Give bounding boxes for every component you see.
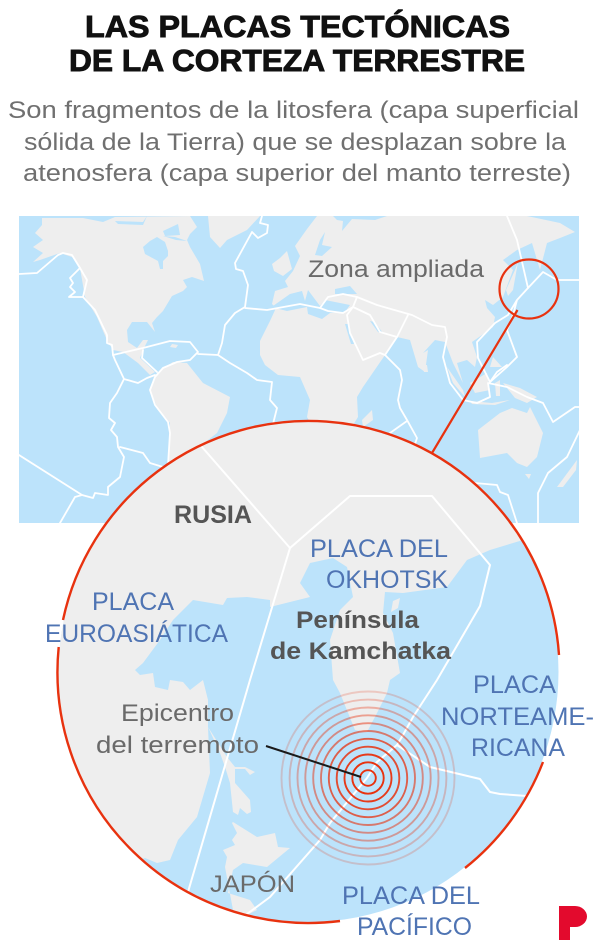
zoomed area locator circle and connector — [432, 260, 558, 453]
subtitle text block: sólida de la Tierra) que se desplazan sobre la — [24, 129, 567, 156]
label: Placa Norteamericana: PLACA — [473, 671, 556, 699]
label: Epicentro del terremoto — [96, 700, 259, 759]
title: LAS PLACAS TECTÓNICAS — [85, 8, 510, 44]
icon: publisher logo — [559, 906, 587, 940]
label: Placa Norteamericana: NORTEAME- — [441, 703, 594, 731]
label: Placa del Pacífico: PLACA DEL — [342, 882, 480, 910]
label: Japón: JAPÓN — [210, 871, 295, 898]
label: Placa del Okhotsk: OKHOTSK — [326, 566, 448, 594]
label: Placa Euroasiática — [45, 588, 228, 648]
label: Placa Norteamericana — [441, 671, 594, 762]
label: Placa Euroasiática: EUROASIÁTICA — [45, 619, 228, 648]
subtitle text block: atenosfera (capa superior del manto terreste) — [23, 160, 571, 187]
label: Península de Kamchatka — [270, 607, 452, 665]
red outline of zoom circle — [57, 421, 559, 923]
title — [69, 8, 525, 78]
label: Península de Kamchatka: Península — [296, 607, 420, 634]
label: Península de Kamchatka: de Kamchatka — [270, 638, 452, 665]
label: Epicentro del terremoto: del terremoto — [96, 732, 259, 759]
label: Placa del Okhotsk — [310, 535, 448, 594]
label: Placa del Pacífico — [342, 882, 480, 941]
zoomed circle map: Kamchatka — [40, 410, 580, 923]
world map with tectonic plates — [19, 216, 580, 523]
plate boundaries inside zoom circle — [188, 447, 527, 914]
zona ampliada label: Zona ampliada — [308, 256, 485, 283]
epicentre concentric rings — [282, 692, 454, 864]
label: Placa Norteamericana: RICANA — [471, 734, 565, 762]
epicentre leader line — [266, 746, 361, 777]
label: Rusia: RUSIA — [174, 501, 252, 529]
subtitle text block: Son fragmentos de la litosfera (capa superficial — [8, 97, 579, 124]
label: Placa del Pacífico: PACÍFICO — [357, 912, 472, 941]
label: Placa Euroasiática: PLACA — [92, 588, 174, 616]
title: DE LA CORTEZA TERRESTRE — [69, 43, 525, 78]
land inside zoom circle — [58, 422, 521, 914]
label: Placa del Okhotsk: PLACA DEL — [310, 535, 448, 563]
label: Epicentro del terremoto: Epicentro — [121, 700, 234, 727]
subtitle text block — [8, 97, 579, 187]
